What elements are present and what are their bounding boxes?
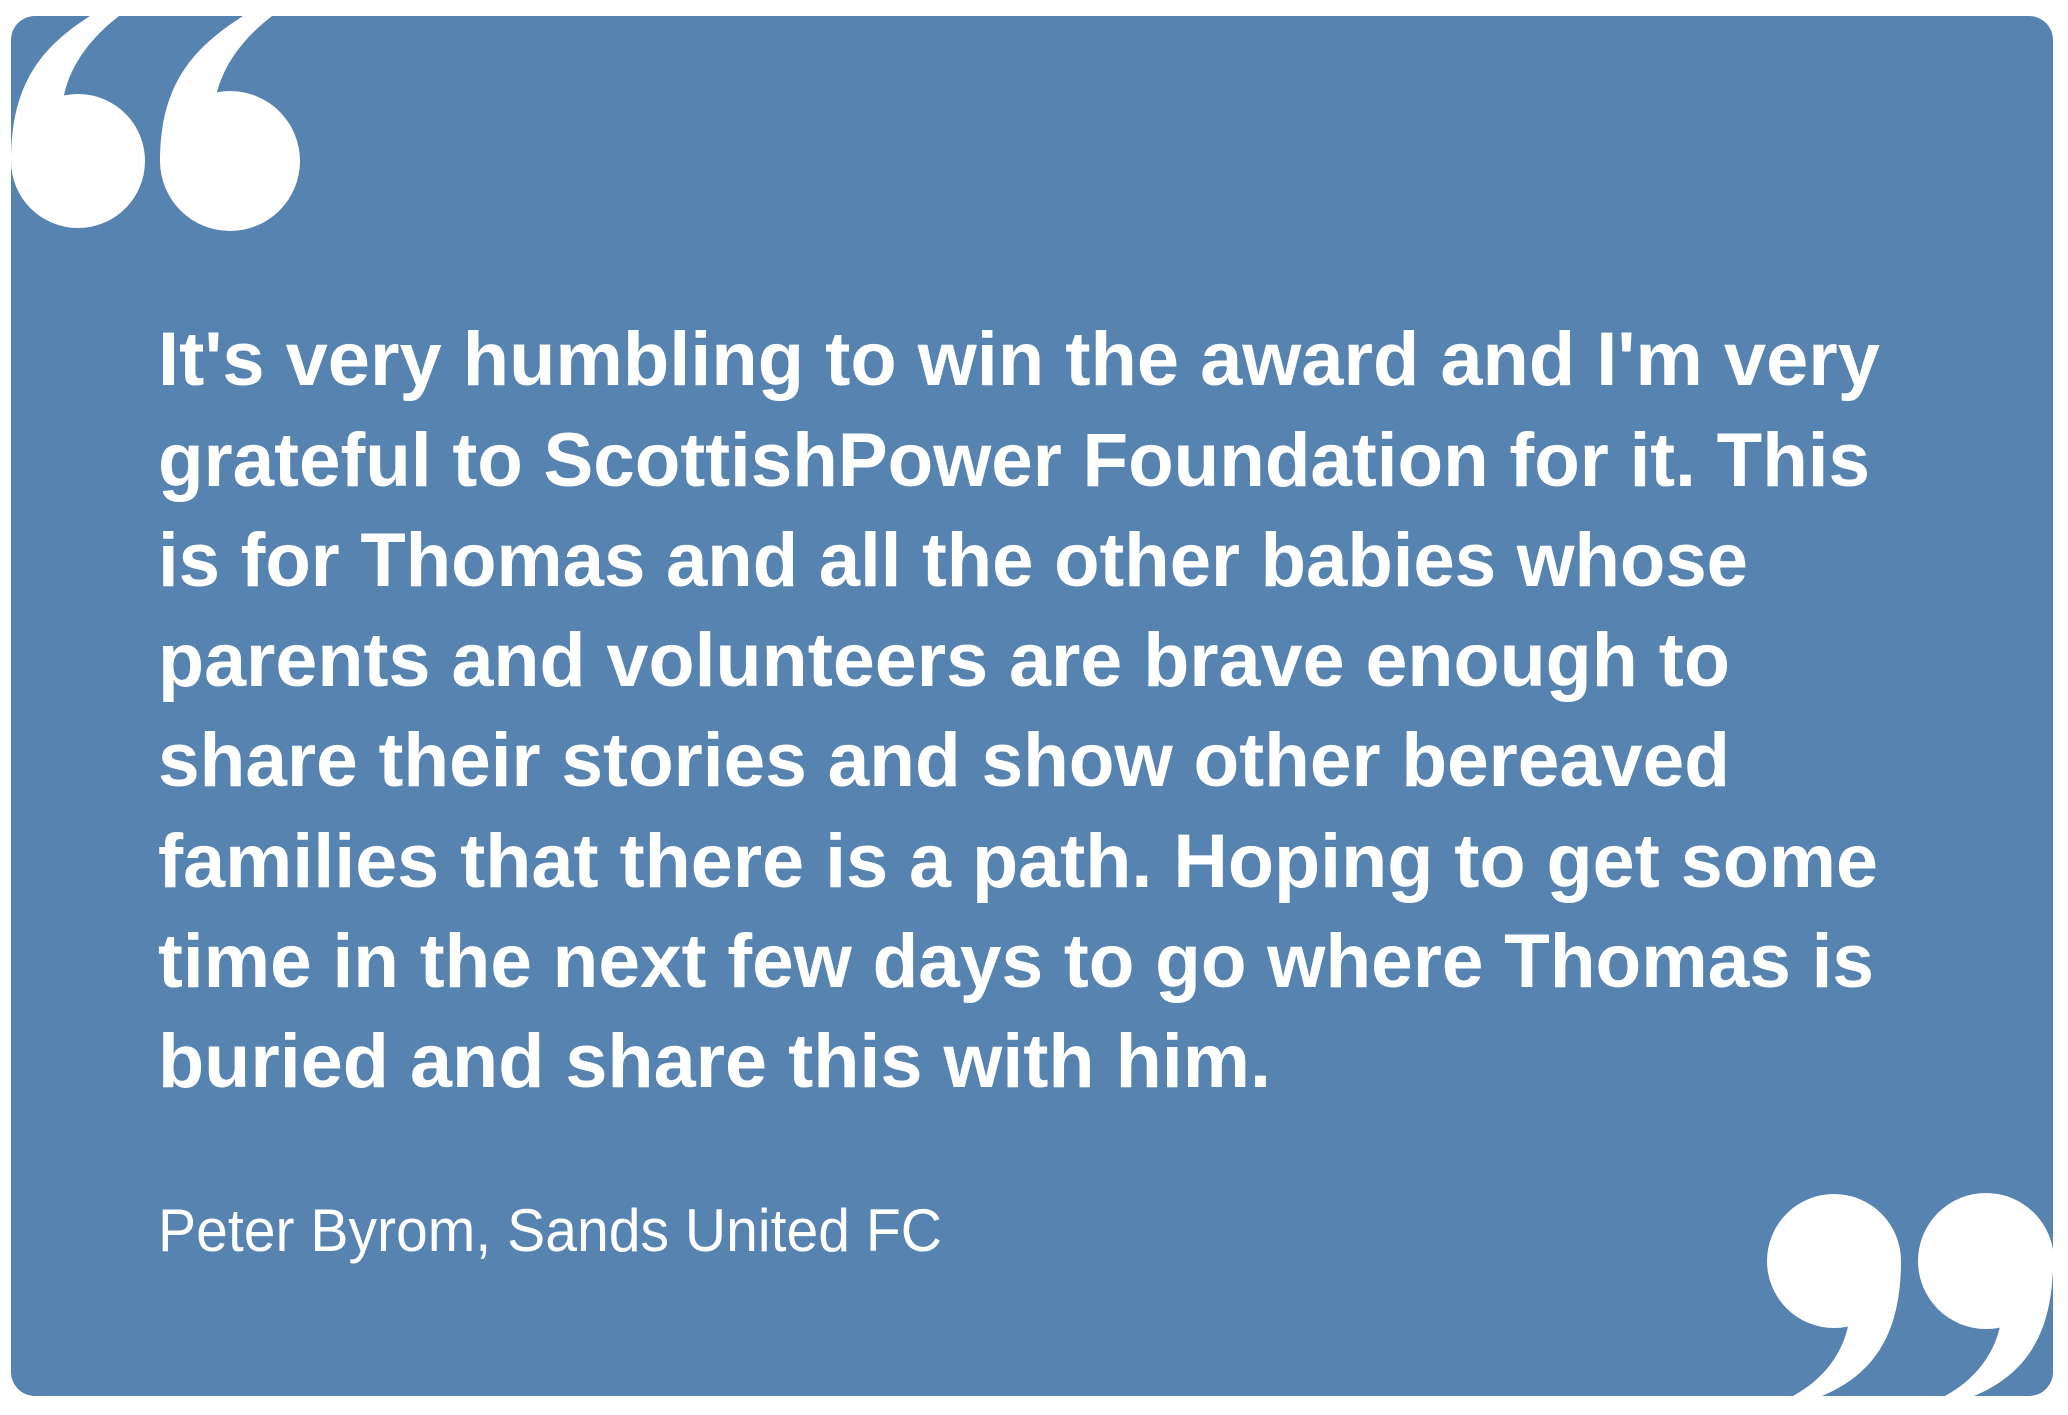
text block: attribution: Peter Byrom, Sands United FC bbox=[158, 1197, 942, 1264]
text block: quote: parents and volunteers are brave enough to bbox=[158, 618, 1730, 703]
text block: quote: time in the next few days to go where Thomas is bbox=[158, 919, 1874, 1004]
text block: quote bbox=[158, 317, 1880, 1104]
text block: quote: share their stories and show other bereaved bbox=[158, 718, 1730, 803]
text block: quote: grateful to ScottishPower Foundation for it. This bbox=[158, 418, 1870, 503]
text block: quote: is for Thomas and all the other babies whose bbox=[158, 518, 1748, 603]
text block: quote: buried and share this with him. bbox=[158, 1019, 1271, 1104]
text block: quote: It's very humbling to win the award and I'm very bbox=[158, 317, 1880, 402]
icon: closing quotation marks bbox=[1767, 1193, 2054, 1396]
icon: opening quotation marks bbox=[11, 16, 300, 231]
text block: quote: families that there is a path. Hoping to get some bbox=[158, 819, 1878, 904]
